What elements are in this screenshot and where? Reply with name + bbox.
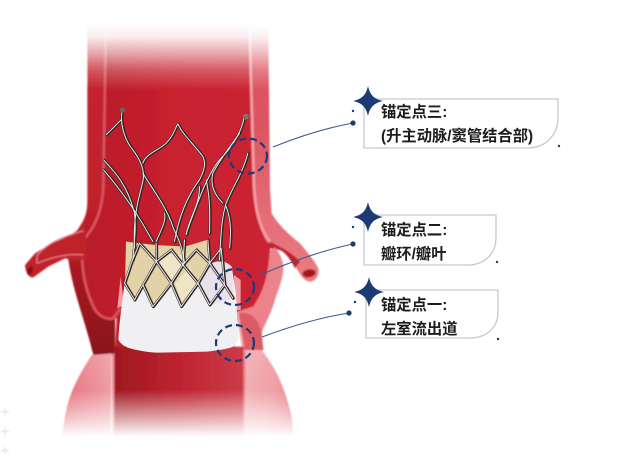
bottom fade — [40, 390, 313, 437]
anchor circle two — [216, 269, 254, 305]
callout box three — [364, 99, 558, 148]
tan leaflets — [125, 240, 212, 307]
leader line two — [258, 244, 353, 276]
label one: 左室流出道 — [381, 320, 458, 338]
lower right tissue — [245, 350, 295, 456]
left sinus and wall — [68, 20, 117, 355]
aorta anatomy — [25, 0, 318, 456]
anchor circle one — [216, 325, 254, 361]
star icon three — [353, 86, 383, 116]
right lower band edge — [237, 312, 244, 353]
dots — [346, 110, 560, 340]
right pink tab — [234, 275, 241, 310]
callout box two — [364, 215, 496, 265]
left pink tab — [117, 277, 124, 308]
star icon one — [354, 277, 384, 307]
star icon two — [353, 202, 383, 232]
leader line three — [273, 123, 353, 147]
callout box one — [366, 290, 498, 338]
lilac petals — [198, 261, 233, 305]
label three: 锚定点三: — [381, 104, 447, 121]
right wall lining — [249, 20, 270, 242]
right lower band — [239, 313, 263, 353]
label three: (升主动脉/窦管结合部) — [381, 128, 533, 144]
leaflet highlight — [157, 253, 197, 302]
white skirt — [118, 261, 238, 353]
lower lumen linings — [113, 350, 244, 433]
label two: 瓣环/瓣叶 — [381, 246, 446, 262]
lower left tissue — [58, 353, 112, 456]
right wall and right coronary — [248, 20, 318, 282]
top fade — [67, 23, 293, 90]
label two: 锚定点二: — [381, 222, 447, 239]
lumen — [82, 20, 270, 350]
label two — [381, 222, 447, 262]
anchor circle three — [229, 138, 267, 174]
right coronary inner strip — [270, 242, 300, 268]
lower lumen — [113, 347, 244, 456]
left coronary opening — [26, 265, 34, 276]
left coronary highlights — [37, 231, 83, 263]
stent valve — [104, 107, 249, 353]
stent wires — [104, 110, 248, 307]
left coronary artery — [25, 220, 87, 277]
right coronary opening — [302, 268, 316, 278]
right sinus wall — [237, 247, 283, 353]
stent tips — [120, 107, 125, 113]
faint decorative stars — [0, 406, 10, 456]
left wall lining — [82, 20, 121, 319]
leader line one — [262, 313, 349, 337]
label one — [381, 296, 458, 338]
label three — [381, 104, 533, 144]
label one: 锚定点一: — [381, 297, 447, 314]
